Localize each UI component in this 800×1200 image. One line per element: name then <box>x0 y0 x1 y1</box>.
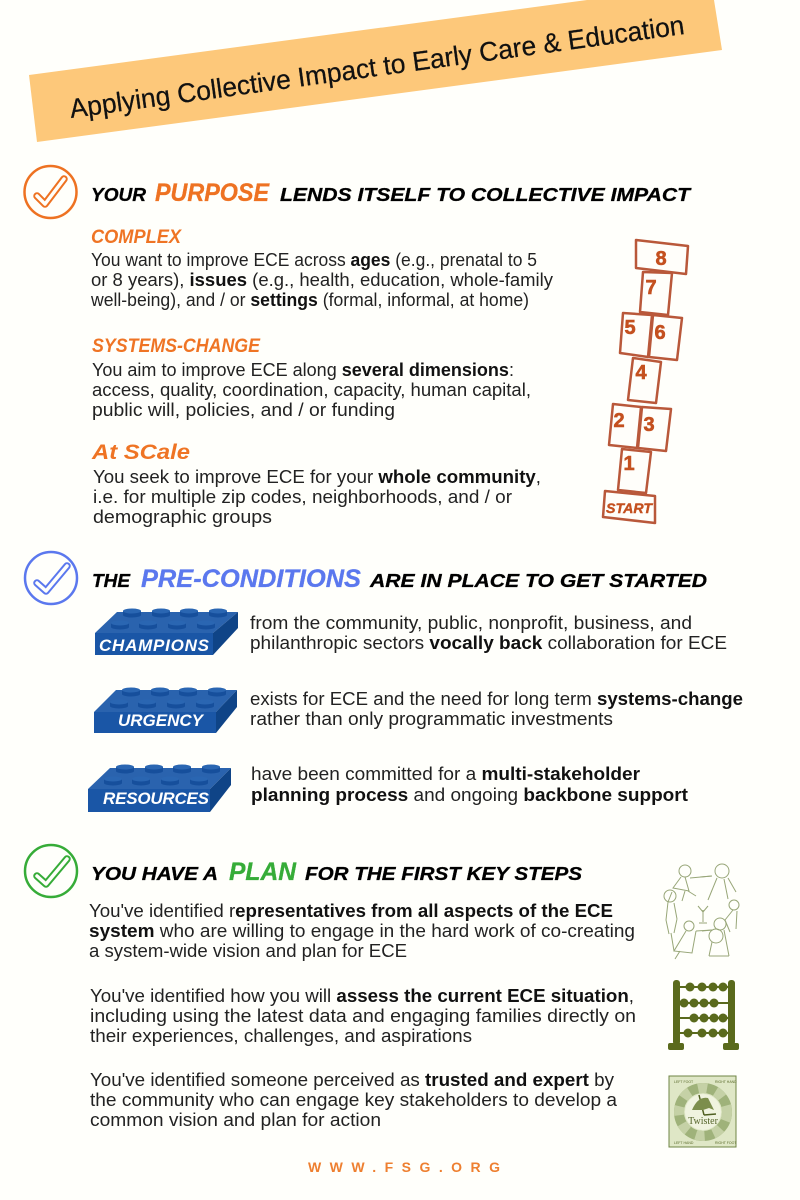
text block: complex: COMPLEX <box>91 227 182 248</box>
heading: plan <box>91 858 582 886</box>
text block: at scale: demographic groups <box>93 507 272 527</box>
text block: assess: You've identified how you will assess the current ECE situation , <box>90 986 634 1006</box>
text block: representatives <box>89 901 635 961</box>
text block: assess: including using the latest data and engaging families directly on <box>90 1006 636 1026</box>
icon: orange check <box>24 166 76 218</box>
icon: twister board: LEFT HAND <box>674 1141 694 1145</box>
text block: trusted expert: You've identified someone perceived as trusted and expert by <box>90 1070 614 1090</box>
text: urgency: exists for ECE and the need for long term systems-change <box>250 689 743 709</box>
title banner: Applying Collective Impact to Early Care & Education <box>68 10 686 124</box>
icon: children in a circle <box>664 864 739 959</box>
heading: purpose: LENDS ITSELF TO COLLECTIVE IMPACT <box>280 185 692 205</box>
icon: hopscotch: 7 <box>645 277 657 299</box>
text block: at scale: You seek to improve ECE for your whole community , <box>93 467 541 487</box>
icon: twister board: LEFT FOOT <box>674 1080 694 1084</box>
icon: twister board: Twister <box>688 1116 719 1127</box>
lego brick: champions: CHAMPIONS <box>99 636 210 655</box>
icon: hopscotch: 3 <box>643 414 655 436</box>
text block: trusted expert: common vision and plan for action <box>90 1110 381 1130</box>
text block: at scale: At SCale <box>91 441 190 464</box>
icon: twister board <box>669 1076 737 1147</box>
text block: complex <box>90 227 553 310</box>
text block: complex: well-being), and / or settings (formal, informal, at home) <box>90 290 529 310</box>
text: champions: philanthropic sectors vocally back collaboration for ECE <box>250 633 727 653</box>
lego brick: resources: RESOURCES <box>103 789 210 808</box>
heading: pre-conditions <box>92 565 707 593</box>
text block: systems-change: SYSTEMS-CHANGE <box>92 336 261 357</box>
icon: hopscotch: 1 <box>623 453 635 475</box>
icon: hopscotch: 8 <box>655 248 667 270</box>
heading: plan: YOU HAVE A <box>91 864 218 884</box>
icon: twister board: RIGHT HAND <box>715 1080 737 1084</box>
lego brick: champions <box>95 608 238 655</box>
text block: at scale: i.e. for multiple zip codes, neighborhoods, and / or <box>93 487 512 507</box>
text: resources <box>251 764 688 805</box>
icon: hopscotch: 5 <box>624 317 636 339</box>
text: resources: have been committed for a multi-stakeholder <box>251 764 640 784</box>
lego brick: resources <box>88 764 231 812</box>
footer url: WWW.FSG.ORG <box>308 1159 500 1175</box>
heading: pre-conditions: THE <box>92 571 131 591</box>
icon: hopscotch <box>603 240 688 523</box>
icon: blue check <box>25 552 77 604</box>
text block: systems-change: public will, policies, and / or funding <box>92 400 395 420</box>
text: resources: planning process and ongoing backbone support <box>251 785 688 805</box>
text block: complex: or 8 years), issues (e.g., health, education, whole-family <box>91 270 553 290</box>
lego brick: urgency <box>94 688 237 733</box>
text block: at scale <box>91 441 541 527</box>
heading: plan: FOR THE FIRST KEY STEPS <box>305 864 582 884</box>
text: urgency <box>250 689 743 729</box>
text block: trusted expert <box>90 1070 618 1130</box>
lego brick: urgency: URGENCY <box>118 711 205 730</box>
icon: hopscotch: 6 <box>654 322 666 344</box>
section: plan <box>25 845 739 1147</box>
heading: purpose <box>91 179 692 207</box>
icon: hopscotch: 2 <box>613 410 625 432</box>
icon: hopscotch: START <box>606 500 653 516</box>
icon: hopscotch: 4 <box>635 362 647 384</box>
text block: assess <box>90 986 636 1046</box>
text block: representatives: a system-wide vision and plan for ECE <box>89 941 407 961</box>
icon: twister board: RIGHT FOOT <box>715 1141 737 1145</box>
text: champions: from the community, public, nonprofit, business, and <box>250 613 692 633</box>
text: urgency: rather than only programmatic investments <box>250 709 613 729</box>
text block: systems-change: You aim to improve ECE along several dimensions: <box>92 360 514 380</box>
heading: pre-conditions: PRE-CONDITIONS <box>141 565 361 593</box>
icon: green check <box>25 845 77 897</box>
heading: plan: PLAN <box>229 858 297 886</box>
text block: systems-change <box>92 336 531 420</box>
heading: purpose: PURPOSE <box>155 179 270 207</box>
section: purpose <box>24 166 692 527</box>
text block: representatives: You've identified r epresentatives from all aspects of the ECE <box>89 901 613 921</box>
icon: abacus <box>668 980 739 1050</box>
text: champions <box>250 613 727 653</box>
text block: systems-change: access, quality, coordination, capacity, human capital, <box>92 380 531 400</box>
text block: trusted expert: the community who can engage key stakeholders to develop a <box>90 1090 618 1110</box>
heading: purpose: YOUR <box>91 185 146 205</box>
heading: pre-conditions: ARE IN PLACE TO GET STARTED <box>369 571 707 591</box>
section: pre-conditions <box>25 552 743 812</box>
text block: assess: their experiences, challenges, and aspirations <box>90 1026 472 1046</box>
text block: representatives: system who are willing to engage in the hard work of co-creating <box>89 921 635 941</box>
text block: complex: You want to improve ECE across ages (e.g., prenatal to 5 <box>91 250 537 270</box>
